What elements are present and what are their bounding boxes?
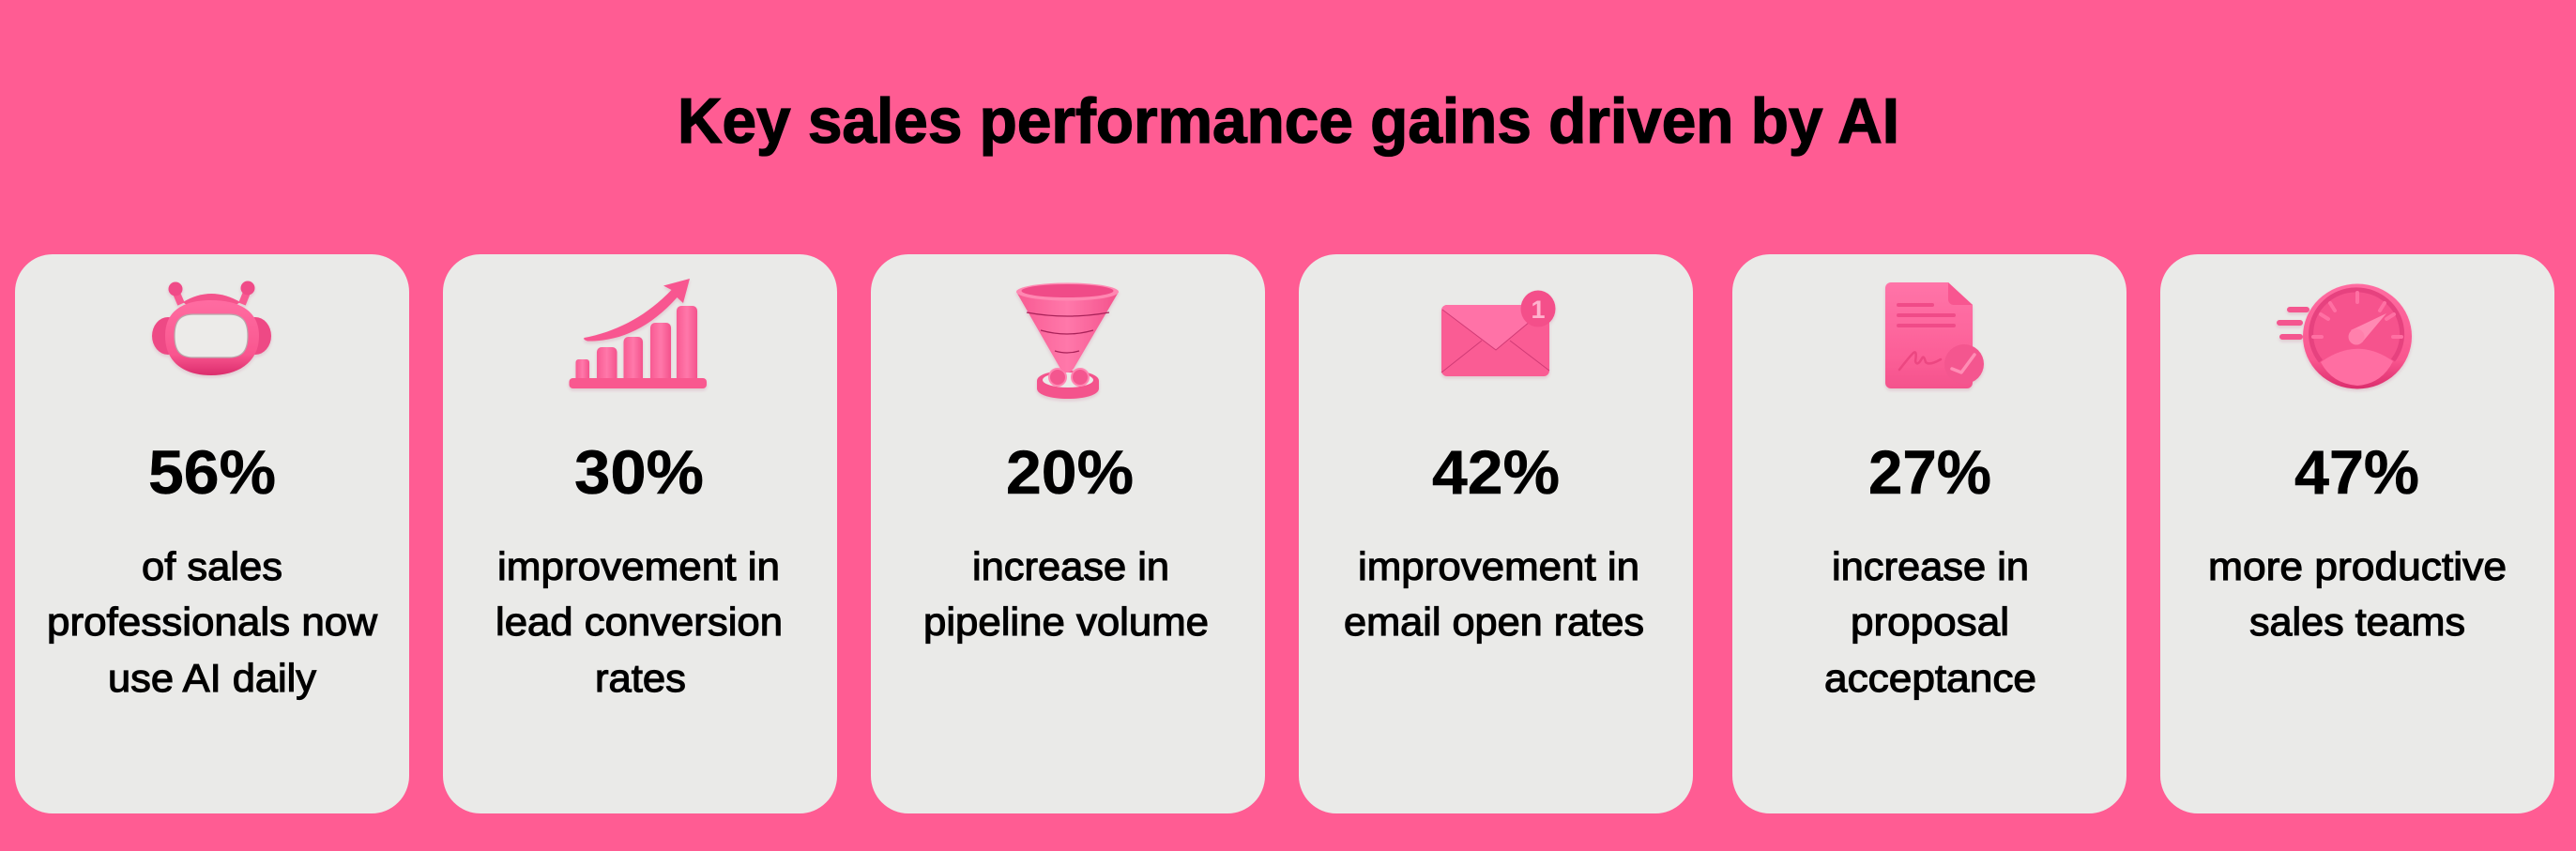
panel: 47% more productive teams bbox=[2160, 254, 2554, 813]
description: improvement in lead conversion rates: rates bbox=[595, 656, 686, 700]
stat: 30%: 30% bbox=[574, 437, 704, 507]
description: more productive sales teams: more productive bbox=[2208, 544, 2507, 588]
description: increase in proposal acceptance: increase in bbox=[1832, 544, 2029, 588]
description: improvement in lead conversion rates: lead conversion bbox=[495, 600, 783, 644]
stat: 27%: 27% bbox=[1868, 437, 1991, 507]
description: of sales professionals now use AI daily: use AI daily bbox=[108, 656, 316, 700]
description: increase in pipeline volume: pipeline volume bbox=[923, 600, 1209, 644]
description: improvement in email open rates bbox=[1344, 544, 1644, 644]
description: more productive sales teams bbox=[2208, 544, 2507, 644]
stat: 56%: 56% bbox=[148, 437, 276, 507]
description: increase in proposal acceptance: acceptance bbox=[1824, 656, 2036, 700]
panel: 30% lead conversion improvement bbox=[443, 254, 837, 813]
description: improvement in lead conversion rates bbox=[495, 544, 783, 700]
panel: 56% sales professionals using AI daily bbox=[15, 254, 409, 813]
description: improvement in email open rates: email open rates bbox=[1344, 600, 1644, 644]
description: increase in proposal acceptance bbox=[1824, 544, 2036, 700]
panel: 27% proposal acceptance increase bbox=[1732, 254, 2126, 813]
stat: 20%: 20% bbox=[1006, 437, 1134, 507]
icon: signed document with check badge bbox=[1885, 282, 1984, 388]
badge number: 1 bbox=[1531, 296, 1546, 324]
panel: 20% pipeline volume increase bbox=[871, 254, 1265, 813]
description: increase in proposal acceptance: proposal bbox=[1851, 600, 2009, 644]
icon: robot head bbox=[152, 281, 271, 375]
description: of sales professionals now use AI daily bbox=[47, 544, 378, 700]
icon: funnel with location pins bbox=[1016, 283, 1119, 399]
description: of sales professionals now use AI daily: of sales bbox=[142, 544, 282, 588]
description: more productive sales teams: sales teams bbox=[2249, 600, 2465, 644]
description: improvement in email open rates: improvement in bbox=[1358, 544, 1639, 588]
description: improvement in lead conversion rates: improvement in bbox=[497, 544, 780, 588]
stat: 47%: 47% bbox=[2294, 437, 2419, 507]
description: increase in pipeline volume: increase in bbox=[972, 544, 1169, 588]
icon: rising bar chart with arrow bbox=[569, 279, 707, 388]
icon: speedometer with motion lines bbox=[2279, 283, 2412, 388]
icon: envelope with notification badge bbox=[1441, 291, 1556, 376]
title: Key sales performance gains driven by AI bbox=[678, 85, 1899, 157]
description: increase in pipeline volume bbox=[923, 544, 1209, 644]
panel: 42% email open rate improvement bbox=[1299, 254, 1693, 813]
stat: 42%: 42% bbox=[1432, 437, 1560, 507]
description: of sales professionals now use AI daily: professionals now bbox=[47, 600, 378, 644]
